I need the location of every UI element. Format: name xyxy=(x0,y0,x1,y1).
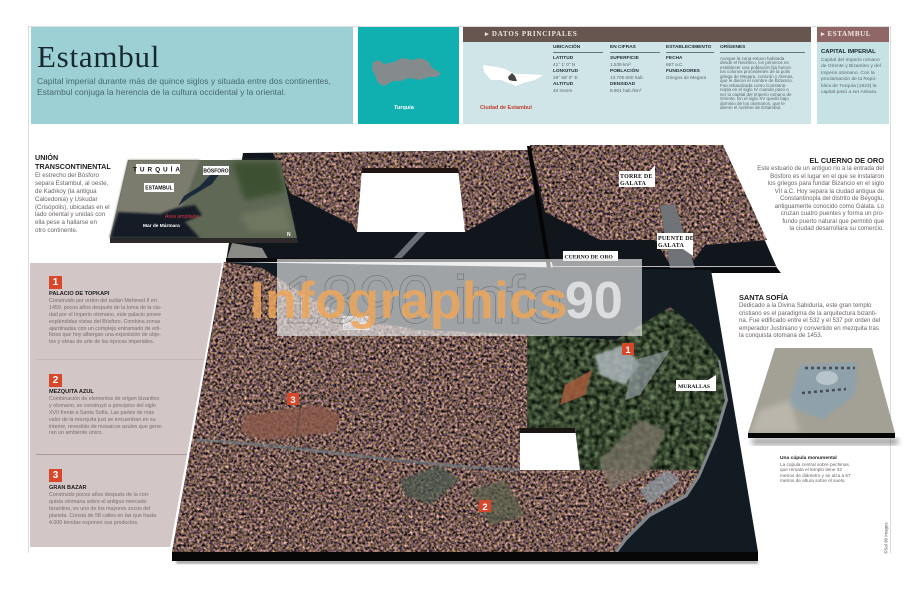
heading: Estambul: Estambul xyxy=(37,39,160,74)
text: Gran Bazar: GRAN BAZAR xyxy=(49,485,87,491)
map: Turkey inset xyxy=(110,160,298,243)
band: Estambul heading xyxy=(817,27,889,42)
marker 1: 1 xyxy=(625,345,631,356)
text: Gran Bazar xyxy=(49,485,156,525)
text: unión transcontinental: Calcedonia) y Uskudar xyxy=(35,196,98,203)
text: capital imperial: Imperio otomano. Con la xyxy=(821,71,875,76)
column: ubicación: LONGITUD xyxy=(553,69,578,74)
text: capital imperial: capital pasó a ser Ankara. xyxy=(821,90,877,95)
text: el cuerno de oro: la ciudad desarrollara su comercio. xyxy=(790,225,884,232)
column: establecimiento xyxy=(666,45,712,80)
caption: una cúpula monumental: metros de diámetro y se alza a 57 xyxy=(780,473,851,478)
text: Mezquita Azul: ran un ambiente único. xyxy=(49,430,103,436)
text: Palacio de Topkapi xyxy=(49,291,162,344)
label: Estambul: ESTAMBUL xyxy=(145,186,173,192)
label: Mezquita Nueva: NUEVA xyxy=(344,325,363,331)
column: orígenes: griega de Megara, corazón y Atenas, xyxy=(720,74,794,79)
watermark: 1890 info xyxy=(283,262,563,338)
column: orígenes: Oriente. En el siglo XV quedó bajo xyxy=(720,96,789,101)
column: establecimiento: ESTABLECIMIENTO xyxy=(666,45,711,50)
maps xyxy=(108,145,902,564)
text: el cuerno de oro: EL CUERNO DE ORO xyxy=(809,156,884,165)
text: Mezquita Azul xyxy=(49,389,162,434)
text: Gran Bazar: bizantino, es uno de los mayores zocos del xyxy=(49,506,150,512)
watermark: 90 xyxy=(565,272,623,330)
column: orígenes: Fue rebautizada como Constanti- xyxy=(720,83,787,88)
caption: una cúpula monumental: metros de altura sobre el suelo. xyxy=(780,478,846,483)
column: ubicación: ALTITUD xyxy=(553,82,573,87)
caption: una cúpula monumental: Una cúpula monumental xyxy=(780,456,837,461)
label: Estambul xyxy=(144,183,174,192)
column: orígenes: Aunque la zona estuvo habitada xyxy=(720,56,784,61)
text: capital imperial: de Oriente y Bizantino y del xyxy=(821,64,881,69)
intro text xyxy=(37,76,331,97)
label: Murallas xyxy=(676,375,716,391)
number 2: 2 xyxy=(53,375,58,386)
label: Torre de Galata xyxy=(619,165,655,187)
watermark xyxy=(250,259,642,338)
watermark: Infographics xyxy=(250,272,568,330)
intro text: Estambul conjuga la herencia de la cultura occidental y la oriental. xyxy=(37,87,286,97)
column: en cifras: SUPERFICIE xyxy=(610,56,639,61)
text: el cuerno de oro: Constantinopla del distrito de Beyoglu, xyxy=(780,195,884,202)
column: orígenes: nopla en el siglo IV cuando pasó a xyxy=(720,87,789,92)
column: establecimiento: 667 a.C. Griegos de Megara xyxy=(666,62,706,80)
credit: ©Sol 90 Images xyxy=(884,522,889,554)
text: Gran Bazar: quista otomana sobre el antiguo mercado xyxy=(49,499,146,505)
number 1: 1 xyxy=(53,277,58,288)
icon: Istanbul province map xyxy=(483,65,543,86)
label: Cuerno de Oro: CUERNO DE ORO xyxy=(564,254,613,260)
column: orígenes: establecer una población fija fueron xyxy=(720,65,791,70)
marker 1 xyxy=(622,343,634,356)
text: Gran Bazar: planeta. Consta de 58 calles en las que hasta xyxy=(49,513,156,519)
text: capital imperial: Capital del Imperio romano xyxy=(821,58,880,63)
column: orígenes: ser la capital del Imperio romano de xyxy=(720,92,792,97)
text: Santa Sofía xyxy=(739,293,880,339)
caption: una cúpula monumental: La cúpula central sobre pechinas xyxy=(780,462,849,467)
cutout: hole in main map xyxy=(520,428,580,470)
text: unión transcontinental: (Crisópolis), ubicadas en el xyxy=(35,204,110,211)
text: capital imperial: proclamación de la Repú- xyxy=(821,77,877,82)
panel: title xyxy=(31,27,353,124)
label: Turquía: TURQUÍA xyxy=(133,164,183,174)
text: Santa Sofía: na. Fue edificado entre el 532 y el 537 por orden del xyxy=(739,317,880,324)
label: Murallas: MURALLAS xyxy=(678,384,710,390)
label: Bósforo xyxy=(203,166,229,175)
column: orígenes: dieron el nombre de Estambul. xyxy=(720,105,781,110)
label: Puente de Galata: GALATA xyxy=(658,243,684,249)
text: Palacio de Topkapi: ficios que hoy albergan una exposición de obje- xyxy=(49,332,161,338)
panel: numbered sights xyxy=(30,263,222,547)
text: Gran Bazar: Construido pocos años después de la con- xyxy=(49,492,149,498)
text: capital imperial: blica de Turquía (1923) la xyxy=(821,84,876,89)
column: orígenes: los colonos procedentes de la polis xyxy=(720,69,790,74)
text: el cuerno de oro: Bósforo es el lugar en el que se instalaron xyxy=(770,173,884,180)
text: capital imperial xyxy=(821,49,881,95)
text: Mezquita Azul: valor de la mezquita just se encuentran en su xyxy=(49,417,156,423)
band: datos principales heading: ▸ DATOS PRINCIPALES xyxy=(485,30,578,38)
label: Mar de Mármara: Mar de Mármara xyxy=(143,223,180,229)
text: Palacio de Topkapi: dad por el Imperio otomano, este palacio posee xyxy=(49,312,161,318)
column: orígenes: dominio de los otomanos, que le xyxy=(720,101,785,106)
caption: una cúpula monumental xyxy=(780,456,851,483)
text: unión transcontinental xyxy=(35,153,111,234)
text: Santa Sofía: SANTA SOFÍA xyxy=(739,293,788,302)
map: Galata slab xyxy=(527,143,781,273)
marker 3: 3 xyxy=(290,395,296,406)
icon: Turkey map xyxy=(372,58,441,86)
text: Palacio de Topkapi: PALACIO DE TOPKAPI xyxy=(49,291,109,297)
column: en cifras: EN CIFRAS xyxy=(610,45,636,50)
text: el cuerno de oro: los griegos para fundar Bizancio en el siglo xyxy=(768,180,884,187)
text: Palacio de Topkapi: Construido por orden del sultán Mehmed II en xyxy=(49,298,157,304)
label: Puente de Galata xyxy=(657,233,694,256)
text: el cuerno de oro: cruzan cuatro puentes y forma un pro- xyxy=(781,210,884,217)
band: Estambul heading: ▸ ESTAMBUL xyxy=(821,30,871,38)
panel: Estambul sidebar xyxy=(817,27,889,124)
map: upper left Golden Horn slab xyxy=(226,148,561,262)
text: unión transcontinental: de Kadıkoy (la antigua xyxy=(35,188,97,195)
column: establecimiento: FECHA xyxy=(666,56,683,61)
label: Mezquita Nueva xyxy=(343,316,373,331)
text: Santa Sofía: Dedicado a la Divina Sabiduría, este gran templo xyxy=(739,302,871,309)
text: unión transcontinental: ella pese a hallarse en xyxy=(35,219,97,226)
label: Mezquita Nueva: MEZQUITA xyxy=(344,318,373,324)
text: el cuerno de oro: VII a.C. Hoy separa la ciudad antigua de xyxy=(775,188,884,195)
marker 3 xyxy=(287,393,299,406)
label: Cuerno de Oro xyxy=(563,251,618,261)
text: Santa Sofía: la conquista otomana de 1453. xyxy=(739,332,822,339)
column: orígenes: que le dieron el nombre de Bizancio. xyxy=(720,78,793,83)
label: Ciudad de Estambul: Ciudad de Estambul xyxy=(480,105,532,111)
column: ubicación: 41° 1' 0'' N 28° 58' 0'' E 40 msnm xyxy=(553,62,578,93)
column: en cifras: DENSIDAD xyxy=(610,82,635,87)
text: Gran Bazar: 4.000 tiendas exponen sus productos. xyxy=(49,520,139,526)
label: Torre de Galata: TORRE DE xyxy=(620,174,653,180)
marker 2: 2 xyxy=(482,502,488,513)
text: unión transcontinental: separa Estambul, al oeste, xyxy=(35,180,108,187)
column: orígenes: desde el Neolítico, los primeros en xyxy=(720,60,789,65)
number 1 xyxy=(49,276,62,289)
text: unión transcontinental: otro continente. xyxy=(35,227,78,234)
text: Palacio de Topkapi: ajardinadas con un complejo entramado de edi- xyxy=(49,326,161,332)
column: en cifras: 1.539 km² 13.700.000 hab. 8.901 hab./km² xyxy=(610,62,644,93)
column: orígenes: ORÍGENES xyxy=(720,45,745,50)
text: capital imperial: CAPITAL IMPERIAL xyxy=(821,49,876,55)
text: Palacio de Topkapi: 1459, pocos años después de la toma de la ciu- xyxy=(49,305,162,311)
text: unión transcontinental: lado oriental y unidas con xyxy=(35,211,105,218)
caption: una cúpula monumental: que remata el templo tiene 32 xyxy=(780,467,842,472)
column: ubicación xyxy=(553,44,580,93)
column: en cifras xyxy=(610,45,644,93)
text: Mezquita Azul: Combinación de elementos de origen bizantino xyxy=(49,396,159,402)
text: Palacio de Topkapi: espléndidas vistas del Bósforo. Combina zonas xyxy=(49,319,160,325)
number 3 xyxy=(49,469,62,482)
text: el cuerno de oro: Este estuario de un antiguo río a la entrada del xyxy=(757,165,884,172)
column: ubicación: UBICACIÓN xyxy=(553,45,580,50)
text: el cuerno de oro: antiguamente conocido como Gálata. Lo xyxy=(775,203,884,210)
text: Mezquita Azul: XVII frente a Santa Sofía. Las partes de más xyxy=(49,410,154,416)
intro text: Capital imperial durante más de quince siglos y situada entre dos continentes, xyxy=(37,76,331,86)
map: main old city slab xyxy=(170,260,758,564)
marker 2 xyxy=(479,500,491,513)
text: Palacio de Topkapi: tos y obras de arte de las épocas imperiales. xyxy=(49,339,154,345)
label: north mark: N xyxy=(287,232,291,238)
text: unión transcontinental: El estrecho del Bósforo xyxy=(35,172,99,179)
label: Torre de Galata: GALATA xyxy=(620,181,646,187)
number 2 xyxy=(49,374,62,387)
text: Santa Sofía: cristiano es el paradigma de la arquitectura bizanti- xyxy=(739,310,877,316)
column: en cifras: POBLACIÓN xyxy=(610,69,639,74)
column: ubicación: LATITUD xyxy=(553,56,573,61)
column: orígenes xyxy=(720,44,794,110)
cutout: hole in upper map xyxy=(357,168,465,232)
text: el cuerno de oro xyxy=(757,156,884,232)
number 3: 3 xyxy=(53,470,58,481)
label: área ampliada: Área ampliada xyxy=(165,213,199,220)
label: Bósforo: BÓSFORO xyxy=(203,167,229,175)
text: Santa Sofía: emperador Justiniano y convertido en mezquita tras xyxy=(739,324,879,332)
band: datos principales heading xyxy=(463,27,811,42)
text: unión transcontinental: UNIÓN xyxy=(35,153,58,162)
image: Santa Sofía slab xyxy=(748,348,898,445)
text: Mezquita Azul: MEZQUITA AZUL xyxy=(49,389,94,395)
panel: datos principales xyxy=(463,27,811,124)
text: el cuerno de oro: fundo puerto natural que permitió que xyxy=(782,218,884,225)
column: establecimiento: FUNDADORES xyxy=(666,69,700,74)
label: Puente de Galata: PUENTE DE xyxy=(658,236,694,242)
text: Mezquita Azul: interior, revestido de mosaicos azules que gene- xyxy=(49,424,163,430)
panel: Turkey locator xyxy=(358,27,459,124)
text: unión transcontinental: TRANSCONTINENTAL xyxy=(35,162,111,171)
label: Turquía: Turquía xyxy=(394,105,414,111)
text: Mezquita Azul: y otomano, se construyó a principios del siglo xyxy=(49,403,156,409)
